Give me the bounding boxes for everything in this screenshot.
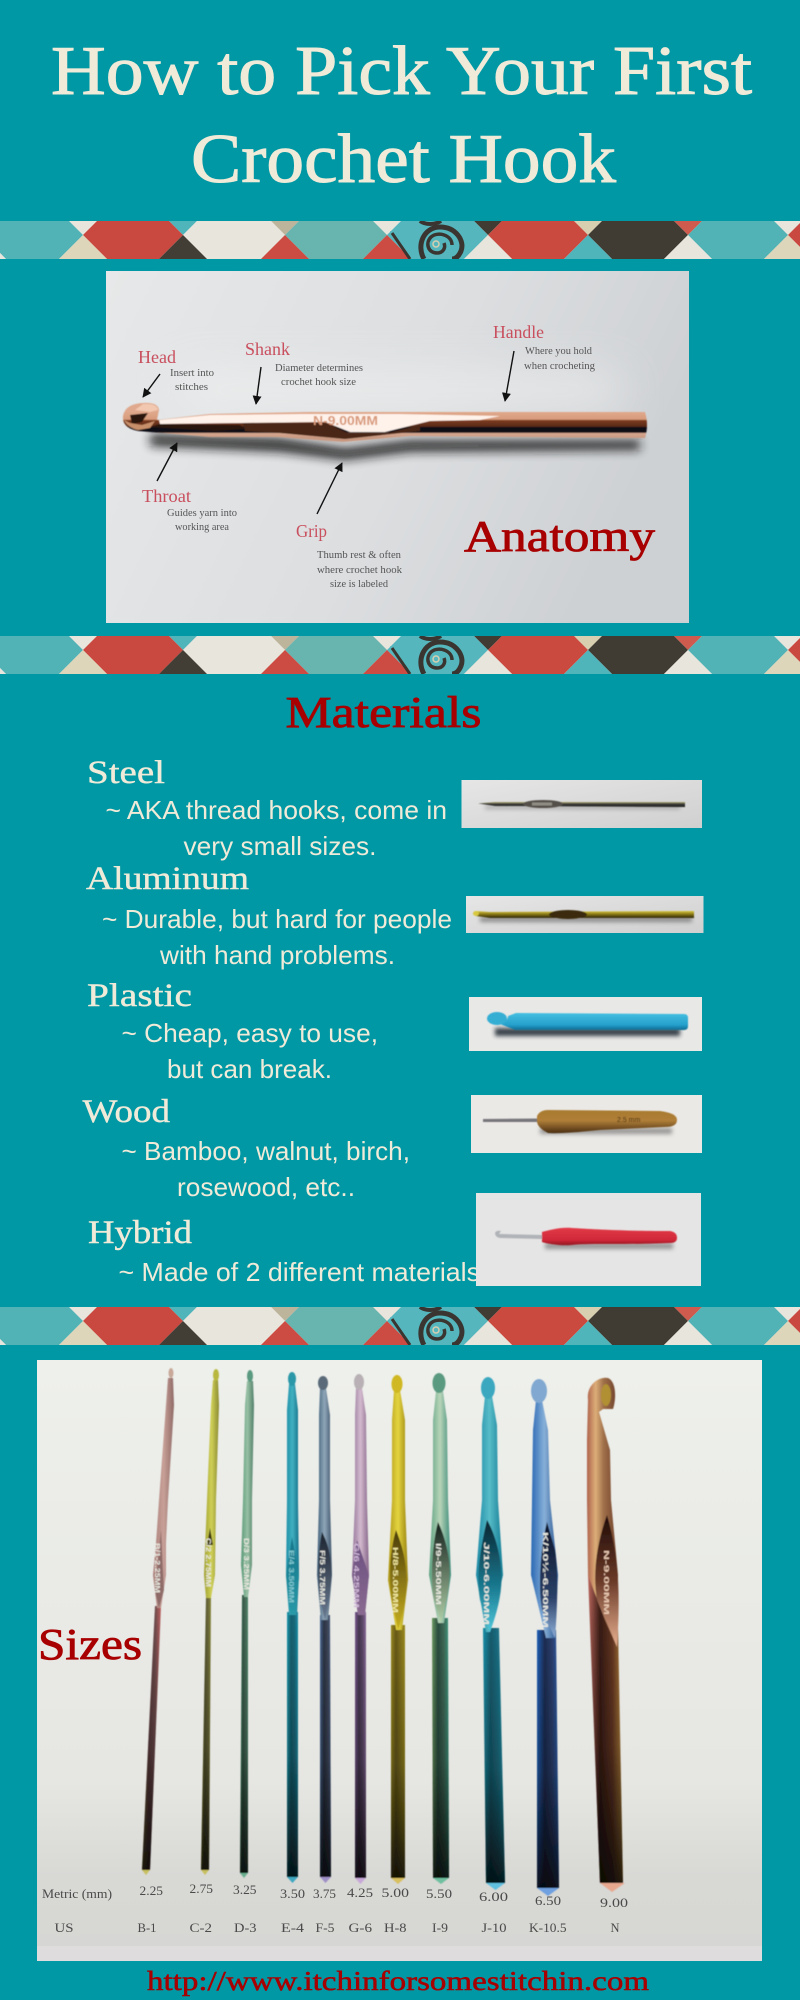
arrow: handle [505, 351, 514, 401]
material: plastic text: Plastic [87, 978, 192, 1014]
US size row: J-10 [482, 1920, 506, 1935]
material: wood photo [471, 1095, 702, 1153]
label: throat: Guides yarn into [167, 507, 237, 519]
material: wood text [82, 1094, 410, 1202]
harlequin pattern strip 3 [0, 1270, 800, 1372]
US size row: C-2 [190, 1920, 212, 1935]
heading: sizes: Sizes [38, 1620, 142, 1669]
label: handle: Where you hold [525, 345, 592, 357]
title: How to Pick Your First [51, 33, 753, 110]
hook 7: H-8 5.00: H/8-5.00MM [391, 1547, 398, 1613]
label: grip [296, 521, 402, 590]
anatomy hook [123, 403, 647, 442]
website url: http://www.itchinforsomestitchin.com [147, 1966, 649, 1996]
label: throat: Throat [142, 486, 191, 506]
US size row: US [54, 1920, 74, 1935]
label: head [138, 347, 214, 393]
material: aluminum text: ~ Durable, but hard for people [102, 904, 452, 934]
hook 8: I-9 5.50: I/9-5.50MM [434, 1543, 441, 1605]
metric size row: 2.25 [140, 1883, 163, 1898]
heading: anatomy: Anatomy [464, 512, 655, 561]
arrow: grip [317, 463, 342, 514]
material: steel text: ~ AKA thread hooks, come in [106, 795, 447, 825]
material: hybrid text: Hybrid [88, 1215, 193, 1251]
label: head: stitches [175, 381, 208, 393]
hook 10: K-10.5 6.50 [531, 1379, 559, 1896]
material: steel text: Steel [87, 755, 165, 791]
label: head: Insert into [170, 367, 214, 379]
metric size row: 6.50 [535, 1893, 561, 1908]
US size row: I-9 [432, 1920, 448, 1935]
US size row: G-6 [348, 1920, 373, 1935]
metric size row [42, 1881, 628, 1910]
metric size row: 5.00 [382, 1885, 409, 1900]
harlequin pattern strip 2 [0, 599, 800, 701]
arrow: head [143, 374, 160, 397]
US size row: B-1 [138, 1920, 156, 1935]
metric size row: 4.25 [347, 1885, 373, 1900]
hook 2: C-2 2.75 [201, 1369, 219, 1875]
hook 6: G-6 4.25 [352, 1374, 369, 1884]
hook 10: K-10.5 6.50: K/10½-6.50MM [541, 1532, 549, 1628]
material: plastic text: ~ Cheap, easy to use, [122, 1018, 378, 1048]
US size row: K-10.5 [529, 1920, 566, 1935]
label: shank [245, 339, 363, 388]
metric size row: 3.25 [233, 1882, 256, 1897]
hook 6: G-6 4.25: G/6 4.25MM [352, 1543, 359, 1608]
material: hybrid photo [476, 1193, 701, 1286]
metric size row: 3.50 [280, 1886, 305, 1901]
hook 11: N 9.00 [587, 1378, 625, 1892]
label: throat [142, 486, 237, 533]
hook 9: J-10 6.00 [476, 1377, 505, 1890]
arrow: shank [256, 367, 261, 404]
label: grip: Thumb rest & often [317, 549, 401, 561]
material: aluminum text: Aluminum [86, 861, 249, 897]
shadow of anatomy hook [150, 434, 640, 460]
material: wood text: Wood [82, 1094, 171, 1130]
metric size row: 9.00 [600, 1895, 628, 1910]
metric size row: 2.75 [190, 1881, 213, 1896]
title: Crochet Hook [191, 121, 616, 198]
US size row [54, 1920, 620, 1935]
hook 5: F-5 3.75: F/5 3.75MM [318, 1550, 325, 1605]
hook 3: D-3 3.25: D/3 3.25MM [242, 1538, 249, 1590]
hook 11: N 9.00: N-9.00MM [602, 1550, 609, 1615]
US size row: F-5 [316, 1920, 334, 1935]
hook 4: E-4 3.50: E/4 3.50MM [287, 1550, 294, 1603]
material: steel photo [462, 780, 702, 828]
label: shank: Diameter determines [275, 362, 363, 374]
hook 1: B-1 2.25 [142, 1368, 174, 1875]
hook 5: F-5 3.75 [317, 1376, 332, 1883]
US size row: N [610, 1920, 620, 1935]
panel: anatomy photo [106, 271, 689, 623]
metric size row: 6.00 [479, 1889, 508, 1904]
material: wood text: ~ Bamboo, walnut, birch, [122, 1136, 410, 1166]
metric size row: Metric (mm) [42, 1886, 112, 1901]
material: plastic text [87, 978, 378, 1084]
anatomy hook: N-9.00MM [313, 413, 378, 428]
material: wood photo: 2.5 mm [617, 1117, 641, 1124]
US size row: E-4 [281, 1920, 305, 1935]
panel: sizes photo [37, 1360, 762, 1961]
heading: materials: Materials [286, 688, 482, 737]
material: aluminum text [86, 861, 452, 970]
label: head: Head [138, 347, 176, 367]
title [51, 33, 753, 198]
material: hybrid text: ~ Made of 2 different materials [118, 1257, 480, 1287]
label: grip: where crochet hook [317, 564, 402, 576]
arrow: throat [157, 443, 177, 481]
label: handle: when crocheting [524, 360, 595, 372]
material: steel text: very small sizes. [184, 831, 376, 861]
material: aluminum text: with hand problems. [159, 940, 395, 970]
metric size row: 3.75 [313, 1886, 336, 1901]
label: handle: Handle [493, 322, 544, 342]
label: shank: crochet hook size [281, 376, 356, 388]
hook 4: E-4 3.50 [286, 1372, 299, 1883]
harlequin pattern strip 1 [0, 184, 800, 286]
material: wood text: rosewood, etc.. [177, 1172, 355, 1202]
hook 2: C-2 2.75: C/2 2.75MM [204, 1538, 211, 1587]
label: grip: size is labeled [330, 578, 388, 590]
material: hybrid text [88, 1215, 480, 1287]
material: aluminum photo [466, 896, 704, 933]
material: plastic photo [469, 997, 702, 1051]
metric size row: 5.50 [426, 1886, 452, 1901]
hook 8: I-9 5.50 [429, 1373, 451, 1884]
material: steel text [87, 755, 447, 861]
US size row: D-3 [234, 1920, 256, 1935]
hook 7: H-8 5.00 [388, 1375, 408, 1884]
label: throat: working area [175, 521, 229, 533]
label: grip: Grip [296, 521, 327, 541]
US size row: H-8 [384, 1920, 406, 1935]
hook 3: D-3 3.25 [240, 1370, 254, 1878]
label: handle [493, 322, 595, 372]
material: plastic text: but can break. [167, 1054, 332, 1084]
hook 9: J-10 6.00: J/10-6.00MM [482, 1542, 489, 1625]
label: shank: Shank [245, 339, 290, 359]
hook 1: B-1 2.25: B/1-2.25MM [153, 1543, 160, 1593]
